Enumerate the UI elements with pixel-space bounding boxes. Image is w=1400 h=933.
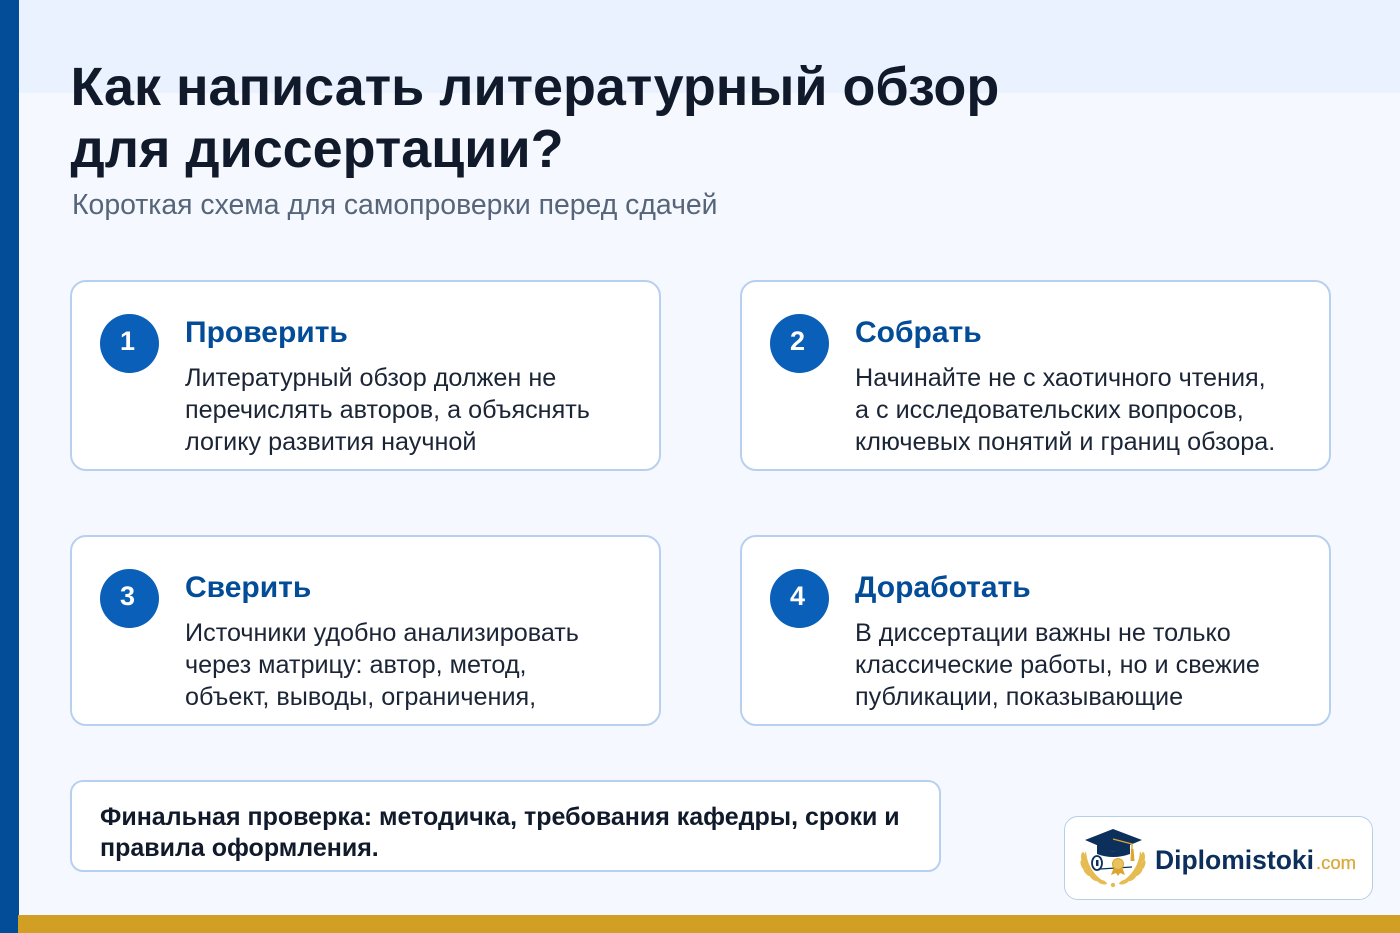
step 3 text: объект, выводы, ограничения,	[185, 683, 536, 711]
step 4 number	[770, 569, 829, 628]
left accent bar	[0, 0, 19, 933]
step 4 text: публикации, показывающие	[855, 683, 1183, 711]
logo panel	[1064, 816, 1373, 900]
step 4 heading: Доработать	[855, 571, 1031, 604]
step 2 text: Начинайте не с хаотичного чтения,	[855, 364, 1266, 392]
step 2 text: а с исследовательских вопросов,	[855, 396, 1244, 424]
step 4 text	[855, 619, 1260, 711]
step 1 number	[100, 314, 159, 373]
logo mark and wordmark	[1080, 829, 1356, 888]
callout text	[100, 803, 900, 862]
step 3 text	[185, 619, 579, 711]
step 1 text: Литературный обзор должен не	[185, 364, 556, 392]
panel: step 4	[740, 535, 1331, 726]
step 3 text: через матрицу: автор, метод,	[185, 651, 527, 679]
panel: step 1	[70, 280, 661, 471]
step 1 heading: Проверить	[185, 316, 348, 349]
step 1 number: 1	[120, 326, 135, 356]
step 2 text: ключевых понятий и границ обзора.	[855, 428, 1275, 456]
panel: step 2	[740, 280, 1331, 471]
top header band	[18, 0, 1400, 93]
step 2 number: 2	[790, 326, 805, 356]
wordmark suffix: .com	[1316, 853, 1356, 873]
step 4 text: В диссертации важны не только	[855, 619, 1231, 647]
title: для диссертации?	[70, 119, 564, 179]
callout text: Финальная проверка: методичка, требования кафедры, сроки и	[100, 803, 900, 831]
step 2 text	[855, 364, 1275, 456]
step 1 text: перечислять авторов, а объяснять	[185, 396, 590, 424]
callout: final check	[70, 780, 941, 872]
step 2 heading: Собрать	[855, 316, 982, 349]
step 3 heading: Сверить	[185, 571, 311, 604]
step 3 text: Источники удобно анализировать	[185, 619, 579, 647]
icon: graduation cap with laurel	[1079, 829, 1147, 887]
step 1 text	[185, 364, 590, 456]
step 4 text: классические работы, но и свежие	[855, 651, 1260, 679]
step 2 number	[770, 314, 829, 373]
step 3 number: 3	[120, 581, 135, 611]
wordmark: Diplomistoki	[1155, 845, 1314, 875]
step 1 text: логику развития научной	[185, 428, 476, 456]
step 4 number: 4	[790, 581, 805, 611]
subtitle: Короткая схема для самопроверки перед сдачей	[72, 189, 718, 221]
panel: step 3	[70, 535, 661, 726]
title	[70, 57, 999, 179]
callout text: правила оформления.	[100, 834, 379, 862]
title: Как написать литературный обзор	[70, 57, 999, 117]
step 3 number	[100, 569, 159, 628]
bottom accent bar	[18, 915, 1400, 933]
